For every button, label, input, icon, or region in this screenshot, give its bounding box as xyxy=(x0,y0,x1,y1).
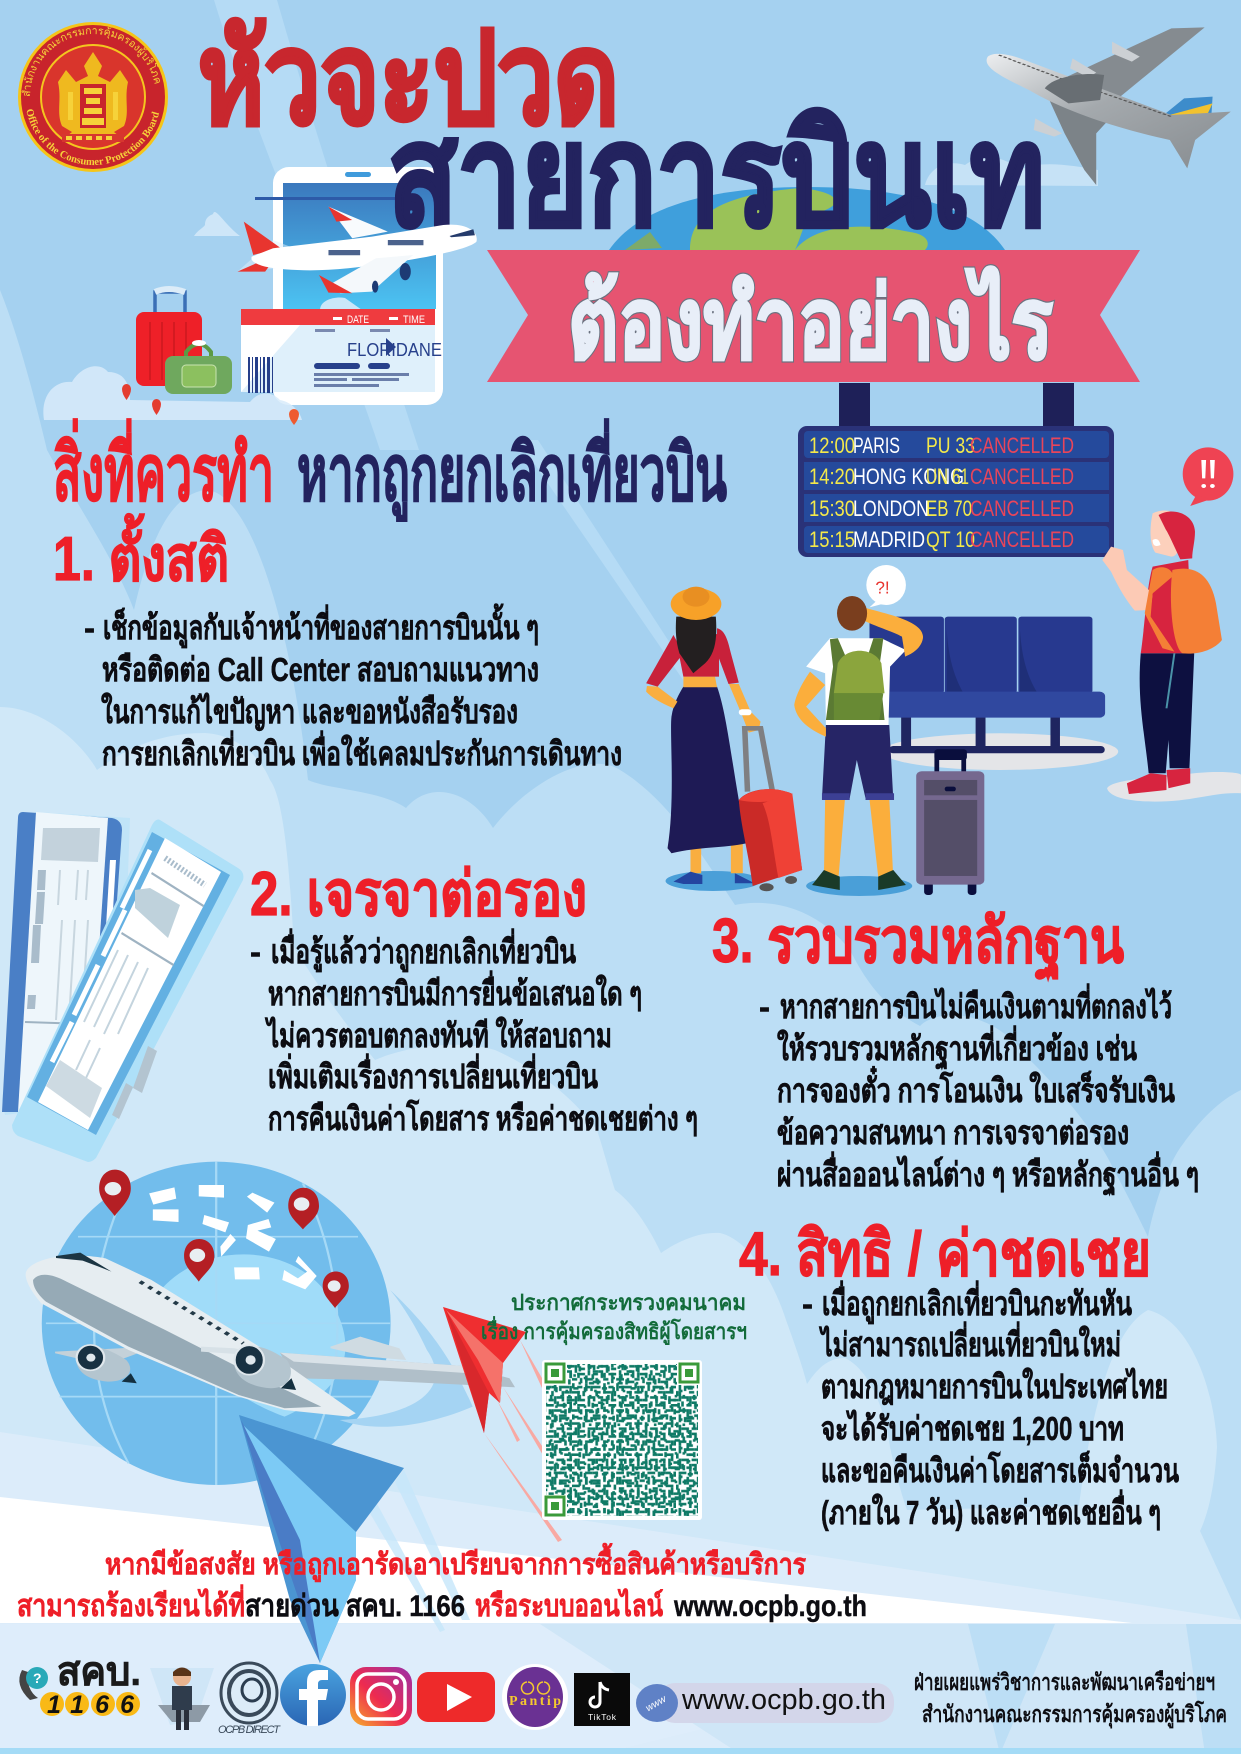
section 2 text: หากสายการบินมีการยื่นข้อเสนอใด ๆ xyxy=(268,970,642,1012)
section 4 text: เมื่อถูกยกเลิกเที่ยวบินกะทันหัน xyxy=(822,1280,1132,1325)
phone xyxy=(255,167,443,405)
flight board: EB 70 xyxy=(926,496,972,521)
tickets illustration xyxy=(2,812,243,1162)
flight board xyxy=(798,383,1114,557)
flight board: 14:20 xyxy=(809,464,855,489)
section 2 text: เพิ่มเติมเรื่องการเปลี่ยนเที่ยวบิน xyxy=(268,1053,598,1095)
location pins xyxy=(99,1170,349,1308)
flight board: CANCELLED xyxy=(970,527,1074,552)
icon: pantip: Pantip xyxy=(509,1694,561,1709)
logo seal: Office of the Consumer Protection Board xyxy=(26,109,159,166)
flight board: UN 61 xyxy=(926,464,969,489)
man in red cap with orange backpack xyxy=(1102,447,1241,802)
contact message: สามารถร้องเรียนได้ที่ xyxy=(17,1584,245,1623)
contact message: สายด่วน สคบ. 1166 xyxy=(245,1590,465,1623)
flight board: CANCELLED xyxy=(970,464,1074,489)
QR caption xyxy=(481,1290,747,1346)
contact message: หรือระบบออนไลน์ xyxy=(475,1588,663,1623)
logo seal: สำนักงานคณะกรรมการคุ้มครองผู้บริโภค xyxy=(22,26,160,96)
section 2 text: เมื่อรู้แล้วว่าถูกยกเลิกเที่ยวบิน xyxy=(271,928,576,973)
banner text: ต้องทำอย่างไร xyxy=(568,267,1053,380)
section 4 text: ไม่สามารถเปลี่ยนเที่ยวบินใหม่ xyxy=(819,1321,1121,1363)
man with backpack and speech bubble xyxy=(794,565,923,896)
section 3 text: ข้อความสนทนา การเจรจาต่อรอง xyxy=(777,1114,1129,1151)
boarding pass: TIME xyxy=(403,314,425,326)
section 3 text xyxy=(759,983,1199,1196)
logo seal xyxy=(18,22,168,172)
flight board: HONG KONG xyxy=(853,464,964,489)
section 1 text: เช็กข้อมูลกับเจ้าหน้าที่ของสายการบินนั้น ๆ xyxy=(103,603,539,649)
flight board: PU 33 xyxy=(926,433,975,458)
icon: youtube xyxy=(417,1672,495,1722)
woman traveller with red suitcase xyxy=(646,587,802,891)
section 1 text xyxy=(84,603,622,772)
clouds xyxy=(43,212,362,420)
title line 2: สายการบินเท xyxy=(388,97,1045,256)
contact message xyxy=(17,1542,867,1623)
banner text: ต้องทำอย่างไร xyxy=(568,267,1053,380)
globe xyxy=(42,1162,473,1485)
gray airplane xyxy=(987,27,1231,185)
grey suitcase xyxy=(916,749,984,895)
flight board: 15:15 xyxy=(809,527,855,552)
globe behind title xyxy=(609,187,1005,250)
footer OCPB direct xyxy=(218,1663,281,1736)
flight board: PARIS xyxy=(853,433,900,458)
airplane xyxy=(26,1253,515,1417)
footer logo OCPB 1166: ? xyxy=(33,1670,42,1686)
icon: pantip xyxy=(502,1664,568,1730)
section 4 text: - xyxy=(802,1285,813,1322)
section 1 heading: 1. ตั้งสติ xyxy=(53,513,229,594)
flight board: MADRID xyxy=(853,527,925,552)
contact message: หากมีข้อสงสัย หรือถูกเอารัดเอาเปรียบจากการซื้อสินค้าหรือบริการ xyxy=(105,1542,806,1582)
section 1 text: - xyxy=(84,609,95,646)
section 3 text: - xyxy=(759,988,770,1025)
boarding pass: FLORIDANE xyxy=(347,340,442,360)
flight board: 12:00 xyxy=(809,433,855,458)
man with backpack and speech bubble: ?! xyxy=(875,579,890,598)
bench xyxy=(869,617,1118,770)
section 2 text: - xyxy=(250,933,261,970)
icon: tiktok: TikTok xyxy=(588,1712,617,1722)
footer figure xyxy=(150,1668,214,1730)
section 4 text xyxy=(802,1280,1179,1531)
department credits xyxy=(914,1669,1227,1729)
contact message: www.ocpb.go.th xyxy=(673,1590,867,1623)
footer logo OCPB 1166: สคบ. xyxy=(57,1650,141,1694)
boarding pass xyxy=(241,309,442,393)
section 1 text: หรือติดต่อ Call Center สอบถามแนวทาง xyxy=(102,651,539,688)
web address pill xyxy=(636,1683,894,1723)
white route dashes xyxy=(149,1185,317,1289)
map pins xyxy=(122,384,299,425)
icon: tiktok xyxy=(574,1673,630,1726)
section 3 heading: 3. รวบรวมหลักฐาน xyxy=(712,907,1124,981)
icon: facebook xyxy=(280,1664,346,1726)
flight board: 15:30 xyxy=(809,496,855,521)
QR code xyxy=(542,1360,702,1520)
front ticket xyxy=(12,820,243,1162)
footer logo OCPB 1166: 1166 xyxy=(47,1691,135,1719)
globe and airplane illustration xyxy=(26,1162,515,1485)
flight board: CANCELLED xyxy=(970,496,1074,521)
footer logo OCPB 1166 xyxy=(19,1650,141,1719)
heading: what to do: หากถูกยกเลิกเที่ยวบิน xyxy=(297,418,727,522)
blue paper plane xyxy=(239,1415,470,1663)
footer OCPB direct: OCPB DIRECT xyxy=(218,1724,281,1736)
heading: what to do: สิ่งที่ควรทำ xyxy=(53,418,274,517)
title line 1: หัวจะปวด xyxy=(198,8,619,151)
section 2 heading: 2. เจรจาต่อรอง xyxy=(250,860,587,929)
red paper plane xyxy=(443,1307,562,1542)
section 2 text xyxy=(250,928,698,1137)
icon: instagram xyxy=(350,1667,412,1726)
section 1 text: ในการแก้ไขปัญหา และขอหนังสือรับรอง xyxy=(101,692,518,731)
suitcase and bag xyxy=(136,289,232,394)
QR caption: เรื่อง การคุ้มครองสิทธิผู้โดยสารฯ xyxy=(481,1315,747,1346)
section 1 text: การยกเลิกเที่ยวบิน เพื่อใช้เคลมประกันการเดินทาง xyxy=(102,730,622,772)
cloud behind gray airplane xyxy=(925,157,1098,186)
white airplane xyxy=(237,207,477,293)
section 4 heading: 4. สิทธิ / ค่าชดเชย xyxy=(739,1220,1151,1289)
QR caption: ประกาศกระทรวงคมนาคม xyxy=(511,1290,746,1315)
section 2 text: การคืนเงินค่าโดยสาร หรือค่าชดเชยต่าง ๆ xyxy=(268,1099,698,1137)
section 2 text: ไม่ควรตอบตกลงทันที ให้สอบถาม xyxy=(265,1016,612,1054)
web address pill: www xyxy=(644,1693,669,1714)
flight board: LONDON xyxy=(853,496,929,521)
banner ribbon xyxy=(487,250,1140,382)
heading: what to do xyxy=(53,418,727,522)
web address pill: www.ocpb.go.th xyxy=(681,1684,886,1716)
boarding pass: DATE xyxy=(347,314,369,326)
section 4 text: จะได้รับค่าชดเชย 1,200 บาท xyxy=(821,1409,1124,1447)
white wedge xyxy=(0,1497,1132,1623)
flight board: CANCELLED xyxy=(970,433,1074,458)
flight board: QT 10 xyxy=(926,527,975,552)
